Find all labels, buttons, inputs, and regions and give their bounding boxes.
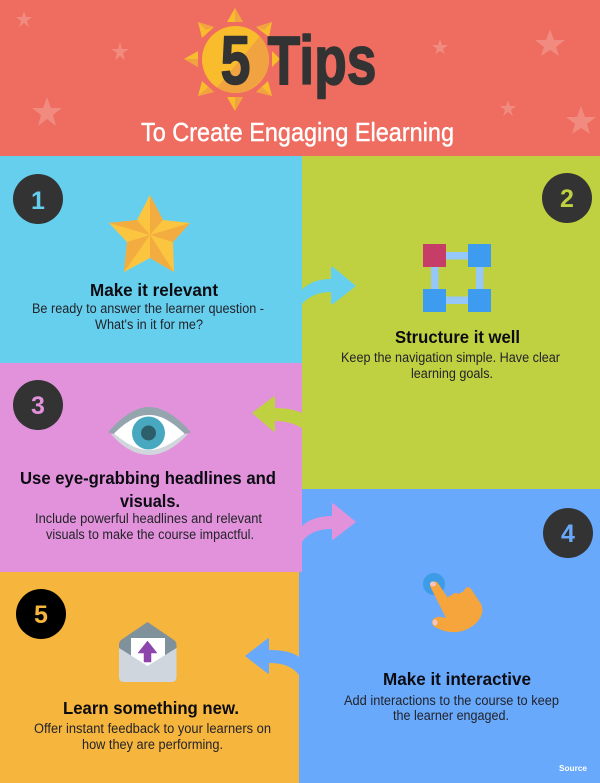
panel 5: learn something new (0, 571, 299, 783)
panel 4: make it interactive (299, 489, 600, 783)
panel 3: eye-grabbing headlines (0, 363, 302, 572)
icon: pointing hand (423, 573, 482, 632)
panel: header (16, 8, 596, 147)
arrow: step 2 to 3 (252, 396, 303, 432)
heading 4: Make it interactive (383, 669, 531, 689)
body text 1 (32, 301, 264, 332)
subtitle: To Create Engaging Elearning (141, 117, 454, 147)
body text 3: Include powerful headlines and relevant (35, 511, 262, 526)
body text 3: visuals to make the course impactful. (46, 527, 254, 542)
number badge 1 (13, 174, 63, 224)
body text 2: Keep the navigation simple. Have clear (341, 350, 560, 365)
title: Tips (268, 22, 376, 99)
body text 4 (344, 693, 559, 723)
body text 3 (35, 511, 262, 542)
arrow: step 3 to 4 (301, 503, 356, 542)
panel 2: structure it well (301, 156, 600, 490)
number badge 2 (542, 173, 592, 223)
title number: 5 (220, 22, 250, 99)
number badge 3: 3 (31, 392, 45, 420)
body text 2 (341, 350, 560, 381)
panel 1: make it relevant (0, 156, 302, 363)
number badge 5: 5 (34, 601, 48, 629)
heading 3 (20, 468, 276, 511)
body text 5: how they are performing. (82, 737, 223, 752)
body text 2: learning goals. (411, 366, 493, 381)
icon: star (109, 195, 190, 272)
arrow: step 4 to 5 (245, 638, 300, 675)
decorative stars (16, 11, 596, 134)
heading 3: Use eye-grabbing headlines and (20, 468, 276, 488)
heading 5: Learn something new. (63, 698, 239, 718)
heading 3: visuals. (120, 491, 180, 511)
icon: envelope (119, 622, 176, 682)
number badge 5 (16, 589, 66, 639)
number badge 4: 4 (561, 520, 575, 548)
heading 2: Structure it well (395, 327, 520, 347)
number badge 2: 2 (560, 185, 574, 213)
number badge 4 (543, 508, 593, 558)
number badge 3 (13, 380, 63, 430)
source link: Source (559, 763, 587, 773)
body text 5 (34, 721, 271, 752)
heading 1: Make it relevant (90, 280, 218, 300)
body text 1: What's in it for me? (95, 317, 203, 332)
body text 4: Add interactions to the course to keep (344, 693, 559, 708)
arrow: step 1 to 2 (300, 267, 356, 304)
number badge 1: 1 (31, 187, 45, 215)
icon: eye (108, 407, 191, 455)
icon: sun (184, 8, 280, 111)
icon: structure diagram (423, 244, 491, 312)
body text 5: Offer instant feedback to your learners on (34, 721, 271, 736)
body text 1: Be ready to answer the learner question - (32, 301, 264, 316)
body text 4: the learner engaged. (393, 708, 509, 723)
